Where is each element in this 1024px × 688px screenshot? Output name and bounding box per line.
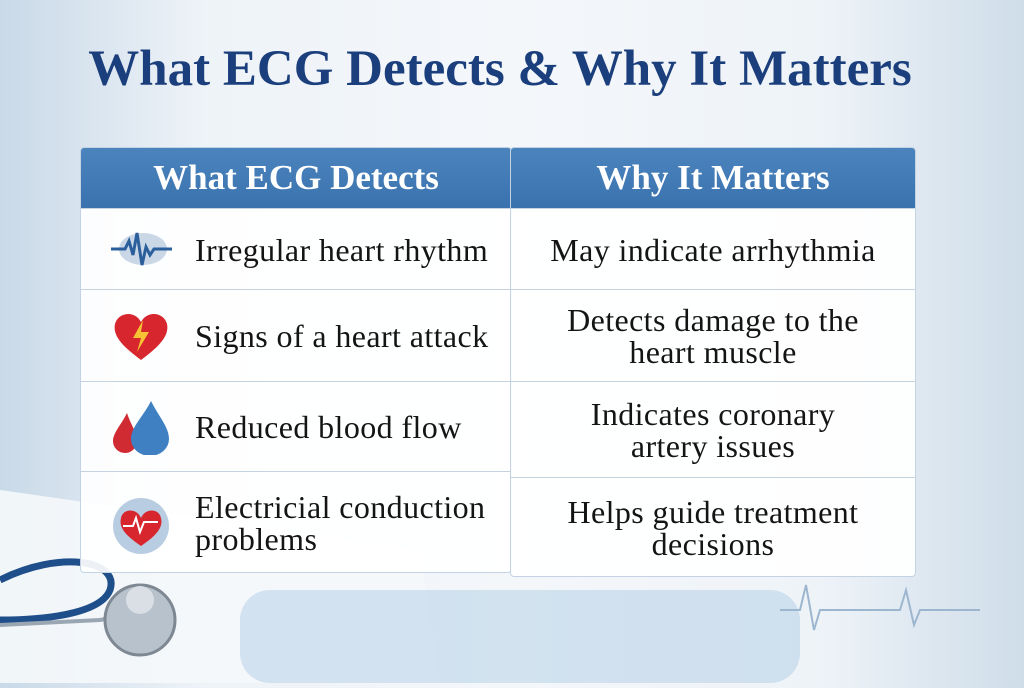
row: treatment [511, 477, 915, 577]
row: treatment: decisions [652, 526, 774, 562]
icon: heart bolt [114, 314, 168, 360]
row: conduction: Electricial conduction [195, 488, 485, 524]
icon: drops [113, 401, 169, 455]
heading: why it matters: Why It Matters [596, 158, 830, 197]
panel: why it matters [510, 147, 916, 577]
title: What ECG Detects & Why It Matters [88, 41, 912, 97]
row: conduction [81, 471, 511, 573]
row: damage [511, 289, 915, 382]
row: damage: Detects damage to the [567, 302, 859, 338]
row: arrhythmia: May indicate arrhythmia [550, 232, 876, 268]
row: irregular rhythm: Irregular heart rhythm [195, 232, 488, 268]
row: blood flow [81, 381, 511, 472]
row: irregular rhythm [81, 208, 511, 290]
row: treatment: Helps guide treatment [568, 494, 858, 530]
row: coronary [511, 381, 915, 478]
icon: ecg wave [111, 232, 172, 266]
row: coronary: artery issues [631, 428, 795, 464]
heading: why it matters [511, 148, 915, 208]
row: conduction: problems [195, 520, 317, 556]
heading: what ECG detects [81, 148, 511, 208]
row: arrhythmia [511, 208, 915, 290]
row: coronary: Indicates coronary [591, 396, 835, 432]
heading: what ECG detects: What ECG Detects [153, 158, 439, 197]
icon: heart in circle [113, 498, 169, 554]
row: damage: heart muscle [629, 334, 797, 370]
row: blood flow: Reduced blood flow [195, 409, 462, 445]
panel: what ECG detects [80, 147, 512, 573]
row: heart attack: Signs of a heart attack [195, 318, 489, 354]
background: bottom paper & stethoscope [0, 490, 980, 683]
row: heart attack [81, 289, 511, 382]
